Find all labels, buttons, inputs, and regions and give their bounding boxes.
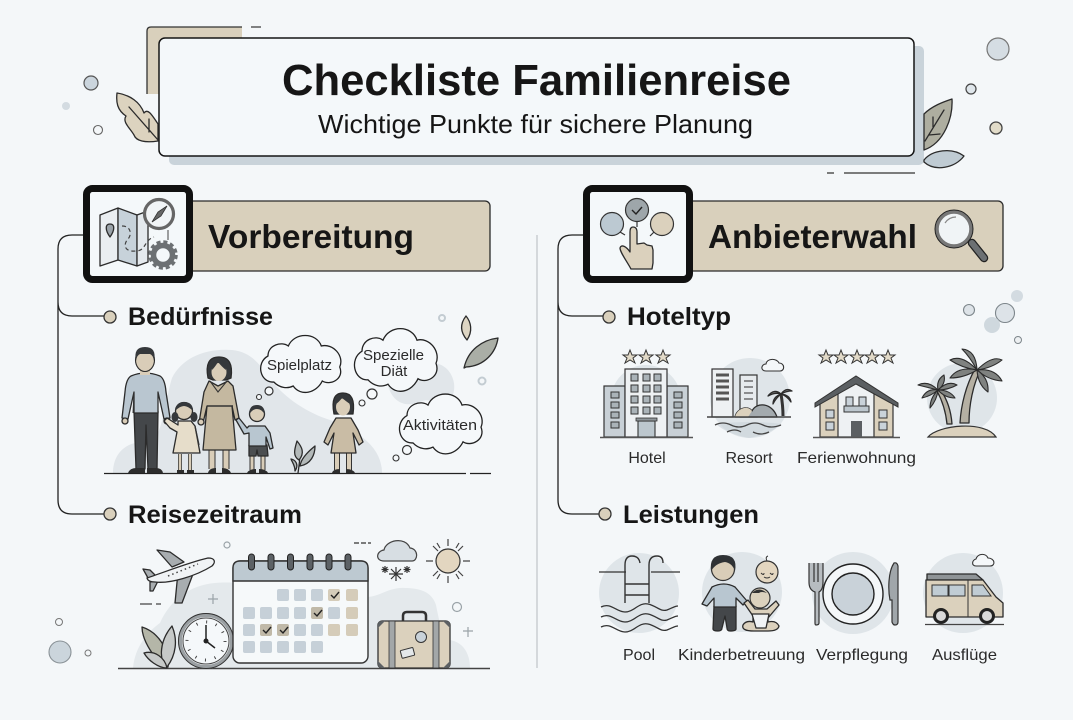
decorative bubbles bottom left <box>49 618 91 663</box>
icon: palm island <box>918 349 1002 437</box>
service: Pool <box>599 553 680 664</box>
decorative leaves and bubbles top right <box>924 38 1009 168</box>
family illustration <box>104 329 491 474</box>
icon: choice hand <box>586 188 690 280</box>
figure: older girl <box>324 393 363 473</box>
thought bubble: Aktivitäten <box>393 394 482 461</box>
thought bubble: Spielplatz <box>256 336 341 400</box>
thought bubble: Spielplatz: Spielplatz <box>267 357 332 374</box>
subsection: Bedürfnisse: Bedürfnisse <box>128 303 273 331</box>
calendar <box>233 554 368 663</box>
icon: leaves <box>142 626 175 668</box>
decorative leaves near bubbles <box>439 315 498 384</box>
connector left column <box>58 235 104 514</box>
subsection: Hoteltyp: Hoteltyp <box>627 303 731 331</box>
icon: magnifier <box>935 210 984 258</box>
heading text: Anbieterwahl <box>708 218 917 255</box>
icon: airplane <box>140 550 214 604</box>
service: Ausflüge <box>923 553 1004 664</box>
service: Kinderbetreuung <box>678 552 805 664</box>
icon: wall clock <box>178 614 234 668</box>
title text: Checkliste Familienreise <box>282 56 791 105</box>
thought bubble: Spezielle Diät: Diät <box>381 363 408 380</box>
subtitle text: Wichtige Punkte für sichere Planung <box>318 109 753 139</box>
service: Pool: Pool <box>623 647 655 664</box>
figure: girl with pigtails <box>164 402 200 473</box>
icon: sun <box>426 539 470 583</box>
centre divider <box>536 235 538 668</box>
icon: suitcase <box>378 612 450 668</box>
hotel option: Ferienwohnung: Ferienwohnung <box>797 450 916 467</box>
service: Kinderbetreuung: Kinderbetreuung <box>678 647 805 664</box>
decorative sparkles <box>208 542 473 637</box>
service: Verpflegung: Verpflegung <box>816 647 908 664</box>
figure: mother <box>198 357 239 473</box>
subsection: Reisezeitraum: Reisezeitraum <box>128 501 302 529</box>
figure: boy <box>236 405 273 473</box>
figure: father <box>122 347 170 473</box>
icon: map compass gear <box>86 188 190 280</box>
icon: cloud with snow <box>354 541 417 581</box>
thought bubble: Aktivitäten: Aktivitäten <box>403 417 477 434</box>
connector right column <box>558 235 603 514</box>
thought bubble: Spezielle Diät: Spezielle <box>363 347 424 364</box>
travel period illustration <box>118 539 490 668</box>
thought bubble: Spezielle Diät <box>354 329 437 406</box>
decorative leaves and bubbles top left <box>62 76 158 142</box>
hotel option: Hotel <box>600 350 693 467</box>
figure: plant <box>291 441 315 473</box>
heading text: Vorbereitung <box>208 218 414 255</box>
subsection: Leistungen: Leistungen <box>623 501 759 529</box>
decorative bubbles right <box>964 290 1023 344</box>
service: Ausflüge: Ausflüge <box>932 647 997 664</box>
service: Verpflegung <box>809 552 908 664</box>
hotel option: Resort: Resort <box>725 450 773 467</box>
hotel option: Ferienwohnung <box>797 350 916 467</box>
hotel option: Resort <box>707 358 792 467</box>
section header: Anbieterwahl <box>586 188 1003 280</box>
section header: Vorbereitung <box>86 188 490 280</box>
hotel option: Hotel: Hotel <box>628 450 666 467</box>
title banner <box>147 27 924 173</box>
